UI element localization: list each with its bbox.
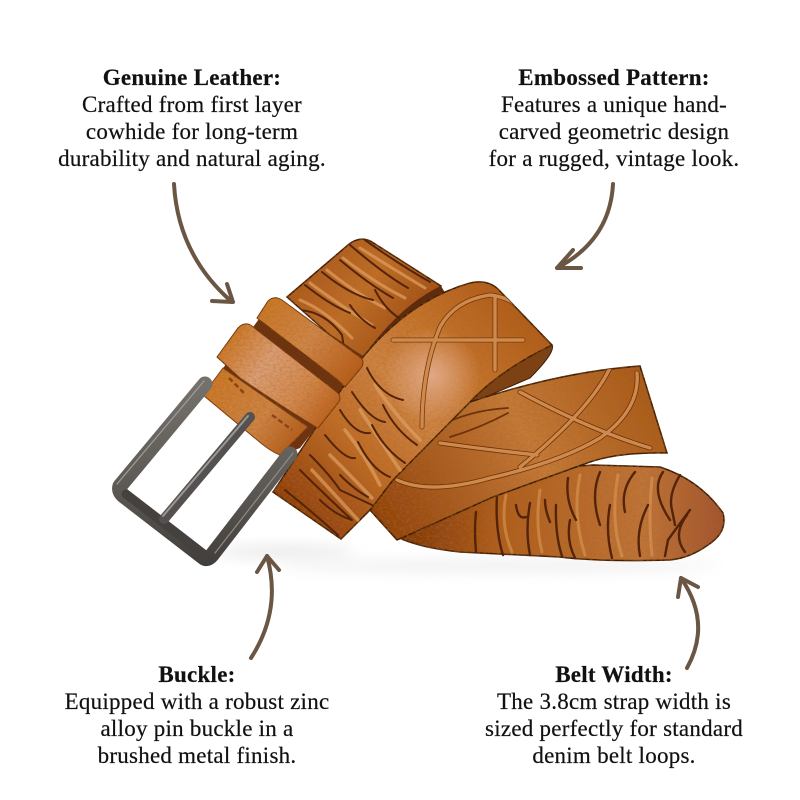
strap under keepers bbox=[205, 297, 368, 456]
callout: belt width: denim belt loops. bbox=[532, 743, 696, 768]
arrow: belt width bbox=[678, 578, 698, 668]
callout: genuine leather: durability and natural aging. bbox=[58, 146, 326, 171]
callout: embossed pattern: Features a unique hand- bbox=[501, 92, 727, 117]
callout: genuine leather bbox=[58, 65, 326, 172]
keeper loop front bbox=[217, 324, 340, 428]
keeper loop rear bbox=[257, 298, 363, 387]
callout: buckle: Equipped with a robust zinc bbox=[65, 689, 329, 714]
callout: embossed pattern bbox=[489, 65, 739, 172]
tip band bbox=[397, 465, 724, 561]
callout: belt width: Belt Width: bbox=[555, 662, 673, 687]
callout: embossed pattern: carved geometric design bbox=[499, 119, 729, 144]
callout: buckle bbox=[65, 662, 329, 768]
callout: genuine leather: Genuine Leather: bbox=[103, 65, 281, 90]
pin buckle bbox=[117, 381, 293, 559]
belt illustration bbox=[112, 182, 725, 670]
top strap band bbox=[287, 239, 447, 362]
callout: embossed pattern: for a rugged, vintage look. bbox=[489, 146, 739, 171]
callout: buckle: brushed metal finish. bbox=[98, 743, 296, 768]
third band with embossing bbox=[360, 366, 667, 545]
callout: genuine leather: Crafted from first layer bbox=[82, 92, 302, 117]
callout: buckle: Buckle: bbox=[158, 662, 236, 687]
callout: belt width: sized perfectly for standard bbox=[485, 716, 743, 741]
shadow bbox=[215, 546, 720, 571]
arrow: embossed pattern bbox=[557, 184, 613, 268]
inner lining bbox=[467, 345, 553, 405]
strap end with stitches bbox=[203, 368, 308, 455]
callout: buckle: alloy pin buckle in a bbox=[100, 716, 294, 741]
callout: belt width: The 3.8cm strap width is bbox=[497, 689, 731, 714]
arrow: buckle bbox=[251, 556, 279, 658]
callout: belt width bbox=[485, 662, 743, 768]
callout: genuine leather: cowhide for long-term bbox=[86, 119, 298, 144]
arrow: genuine leather bbox=[174, 184, 233, 302]
callout: embossed pattern: Embossed Pattern: bbox=[518, 65, 710, 90]
second band with embossing bbox=[273, 282, 552, 539]
